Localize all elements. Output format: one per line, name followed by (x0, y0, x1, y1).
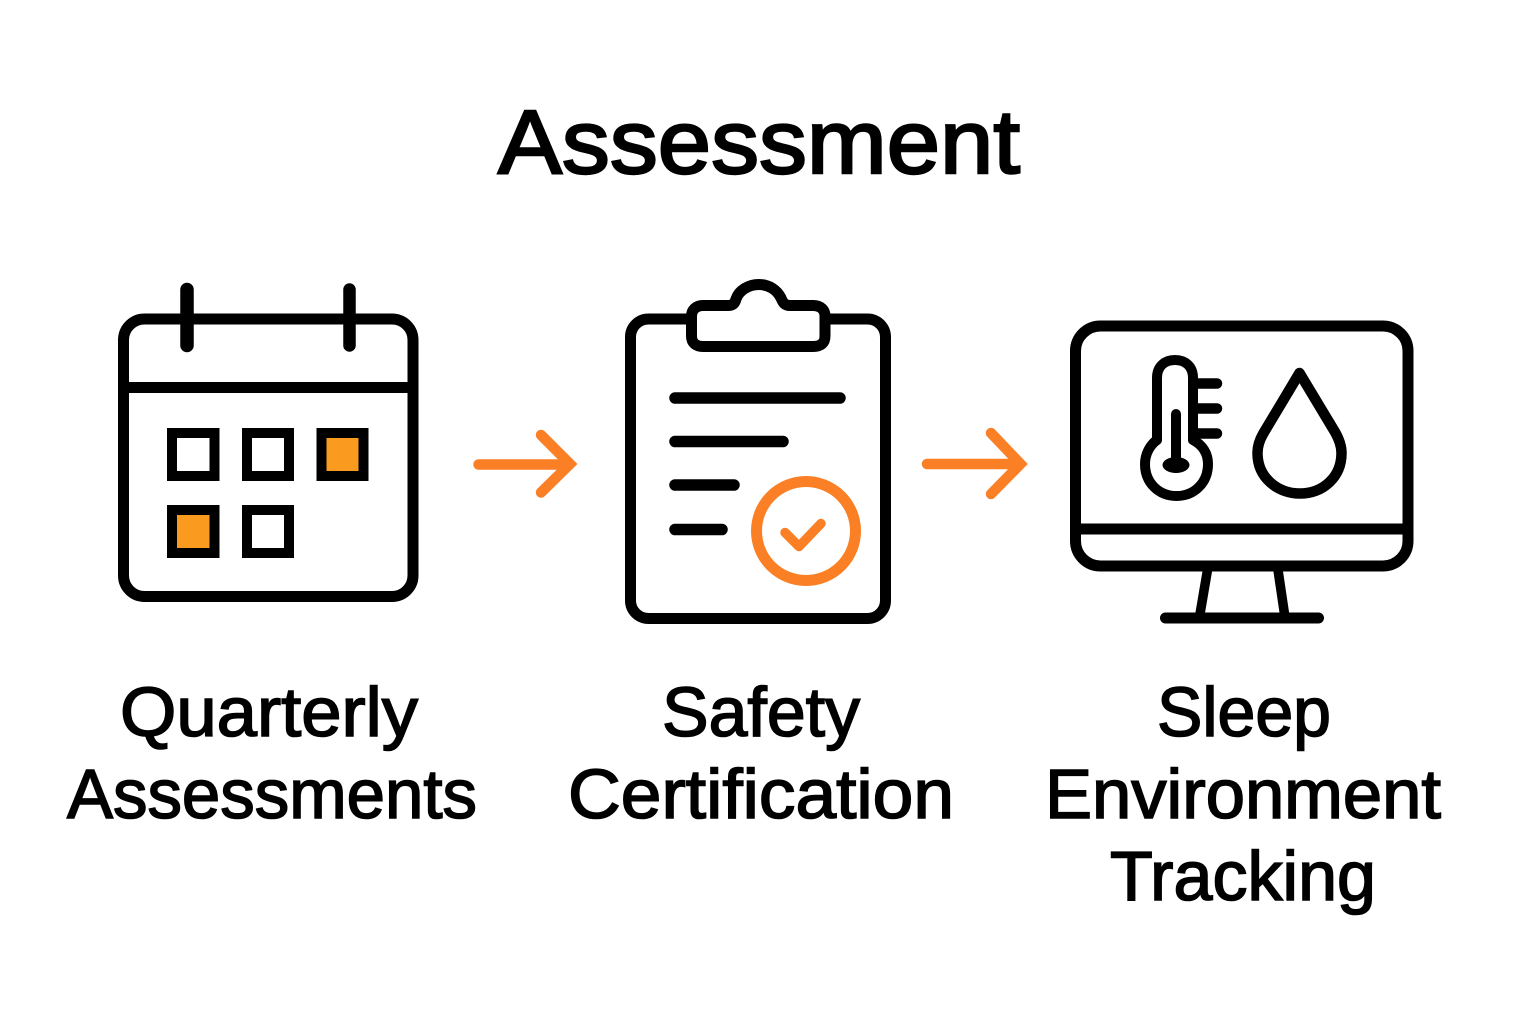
label: Quarterly Assessments: Assessments (67, 755, 477, 833)
icon: monitor with thermometer and water drop (1076, 326, 1408, 618)
label: Sleep Environment Tracking: Environment (1045, 755, 1441, 833)
arrow: calendar to clipboard (478, 435, 570, 492)
label: Safety Certification: Certification (568, 755, 954, 833)
arrow: clipboard to monitor (927, 433, 1020, 494)
label: Quarterly Assessments: Quarterly (120, 673, 418, 751)
label: Safety Certification: Safety (662, 673, 860, 751)
label: Safety Certification (568, 673, 954, 833)
icon: calendar (124, 290, 413, 596)
label: Sleep Environment Tracking: Tracking (1110, 837, 1376, 915)
label: Quarterly Assessments (67, 673, 477, 833)
title: Assessment (498, 93, 1020, 193)
label: Sleep Environment Tracking (1045, 673, 1441, 915)
icon: clipboard with check (630, 284, 886, 618)
label: Sleep Environment Tracking: Sleep (1157, 673, 1331, 751)
